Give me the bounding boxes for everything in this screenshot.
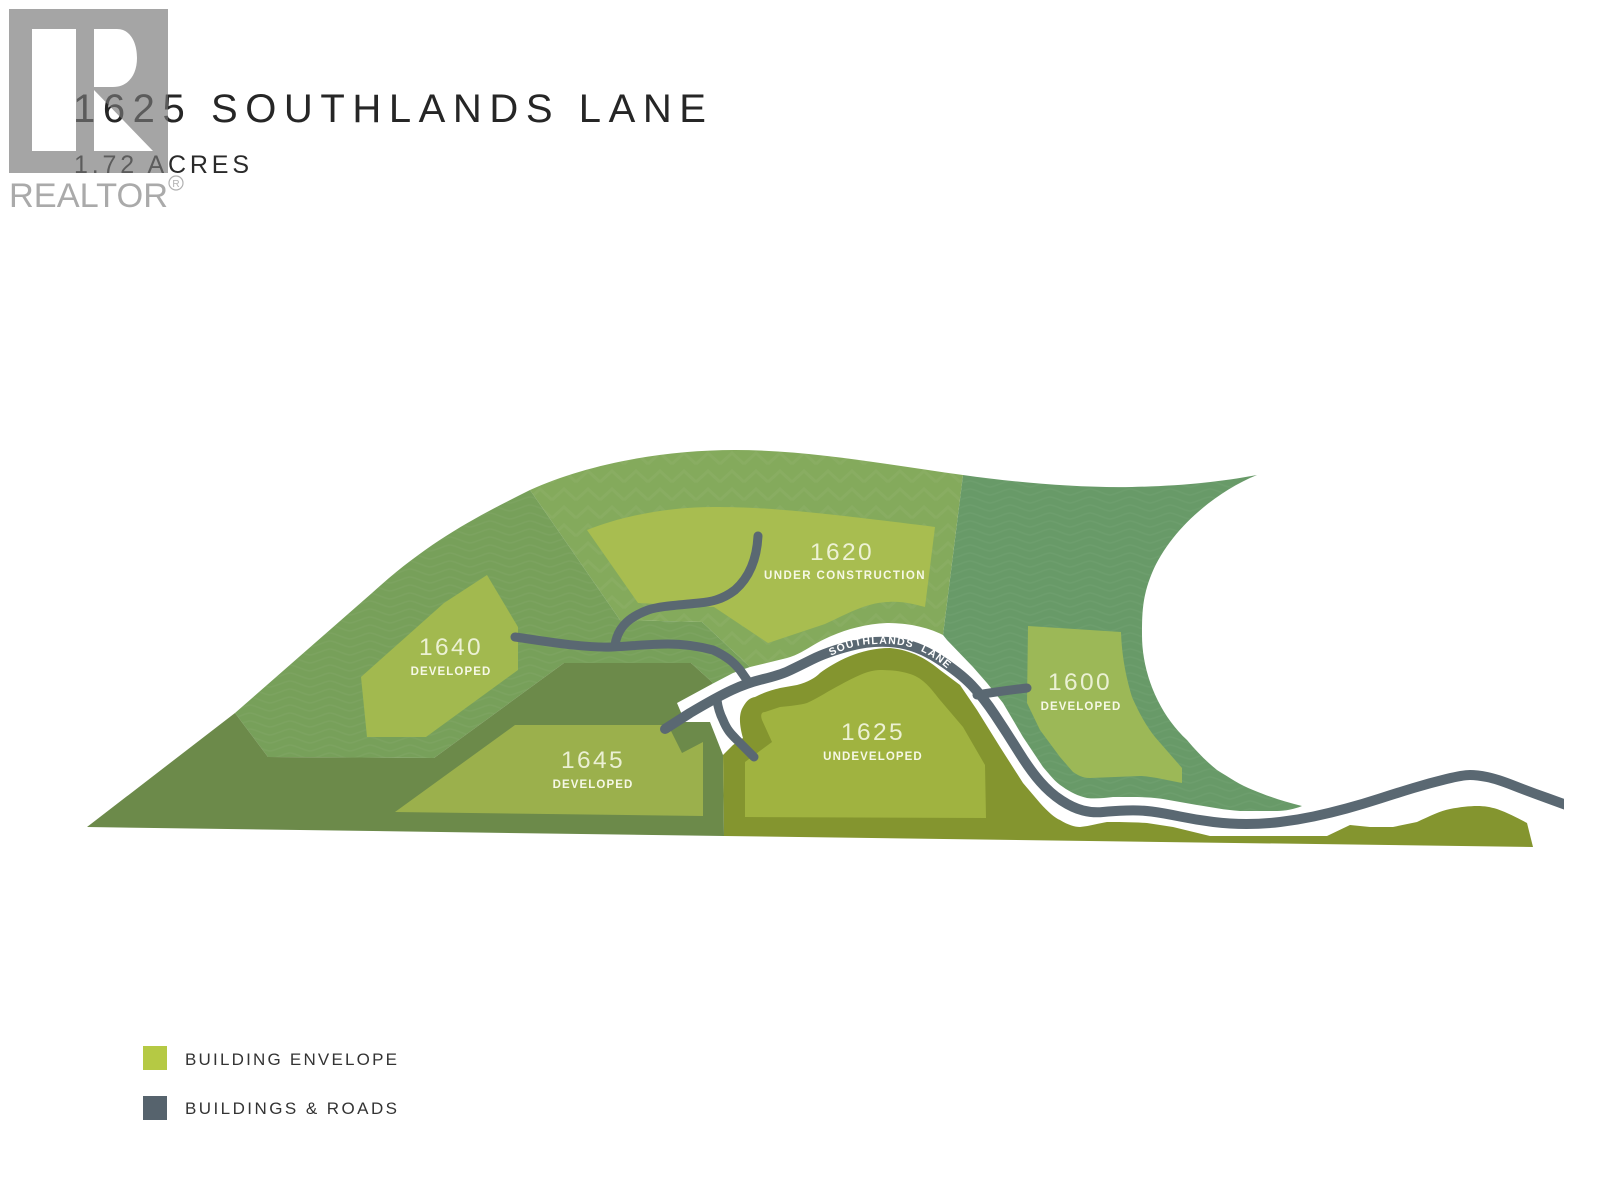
road name label: SOUTHLANDS LANE <box>829 636 952 668</box>
label: lot 1625 <box>823 719 923 763</box>
road: driveway to 1625 <box>717 700 754 757</box>
label: lot 1640: 1640 <box>419 634 483 661</box>
envelope 1620 <box>587 507 935 643</box>
road: driveway to 1640 <box>515 637 747 680</box>
subtitle: acreage: 1.72 ACRES <box>74 151 249 179</box>
label: lot 1645: DEVELOPED <box>553 779 633 791</box>
lot 1645 land <box>87 663 724 836</box>
label: lot 1620 <box>764 539 926 582</box>
label: lot 1600: 1600 <box>1048 669 1112 696</box>
envelope 1600 <box>1027 626 1182 783</box>
label: lot 1620: 1620 <box>810 539 874 566</box>
legend: building envelope <box>143 1046 397 1070</box>
logo: realtor watermark: REALTOR <box>9 177 168 215</box>
label: lot 1640 <box>411 634 491 678</box>
logo: realtor watermark <box>9 9 183 215</box>
legend: building envelope: BUILDING ENVELOPE <box>185 1050 397 1069</box>
logo: realtor watermark: R <box>172 179 180 190</box>
title: 1625 SOUTHLANDS LANE <box>73 87 706 131</box>
site plan map <box>87 450 1564 847</box>
label: lot 1625: 1625 <box>841 719 905 746</box>
road: driveway to 1620 <box>615 536 758 645</box>
label: lot 1645 <box>553 747 633 791</box>
lot 1620 land <box>530 450 963 667</box>
label: lot 1625: UNDEVELOPED <box>823 751 923 763</box>
legend <box>143 1046 397 1120</box>
envelope 1645 <box>395 725 703 816</box>
lot 1625 land <box>723 648 1533 847</box>
lot 1640 land <box>235 490 750 758</box>
legend: buildings and roads: BUILDINGS & ROADS <box>185 1099 397 1118</box>
label: lot 1600: DEVELOPED <box>1041 701 1121 713</box>
label: lot 1640: DEVELOPED <box>411 666 491 678</box>
label: lot 1645: 1645 <box>561 747 625 774</box>
envelope 1625 <box>745 670 986 818</box>
envelope 1640 <box>361 575 518 737</box>
label: lot 1600 <box>1041 669 1121 713</box>
road: southlands lane <box>665 642 1580 824</box>
label: lot 1620: UNDER CONSTRUCTION <box>764 570 926 582</box>
lot 1600 land <box>943 475 1302 811</box>
road: driveway to 1600 <box>977 688 1027 695</box>
legend: buildings and roads <box>143 1096 397 1120</box>
